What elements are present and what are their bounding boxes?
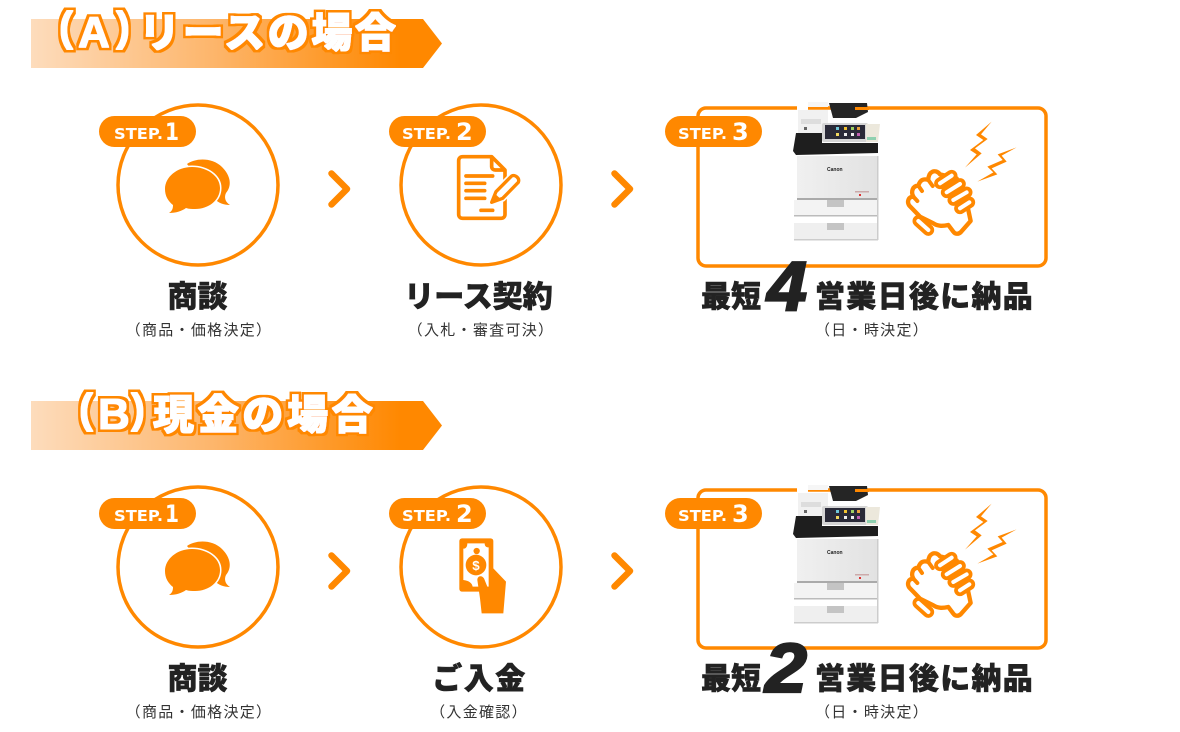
section B: cash flow: [31, 381, 1046, 722]
caption: 商品・価格決定: （商品・価格決定）: [126, 319, 272, 340]
badge: STEP.3: STEP.: [678, 507, 727, 525]
caption: 日・時決定: （日・時決定）: [815, 701, 929, 722]
step 1 circle: negotiation: [99, 105, 278, 265]
badge: STEP.2: 2: [456, 500, 473, 528]
badge: STEP.2: 2: [456, 118, 473, 146]
photo: multifunction printer: Canon: [827, 550, 843, 556]
step 2 circle: payment: [389, 487, 561, 647]
icon: speech bubbles: [165, 159, 230, 213]
badge: STEP.2: [389, 498, 486, 529]
photo: multifunction printer: [793, 102, 880, 240]
photo: multifunction printer: [793, 485, 880, 624]
banner: (B) cash: [31, 381, 442, 450]
caption: 入金確認: （入金確認）: [430, 701, 528, 722]
banner: (A) lease: A: [78, 8, 110, 57]
photo: multifunction printer: Canon: [827, 167, 843, 173]
heading: 最短2営業日後に納品: [701, 629, 1034, 707]
icon: clasped hands with lightning: [908, 122, 1017, 234]
caption: 日・時決定: （日・時決定）: [815, 319, 929, 340]
banner: (A) lease: (: [59, 3, 73, 50]
step 2 circle: contract: [389, 105, 561, 265]
arrow: [614, 556, 630, 586]
banner: (A) lease: [31, 0, 442, 68]
heading: 最短2営業日後に納品: 最短: [701, 654, 761, 698]
section A: lease flow: [31, 0, 1046, 340]
badge: STEP.2: [389, 116, 486, 147]
badge: STEP.1: [99, 498, 196, 529]
icon: document and pen: [459, 157, 519, 218]
badge: STEP.2: STEP.: [402, 507, 451, 525]
badge: STEP.1: STEP.: [114, 125, 163, 143]
arrow: [332, 174, 347, 204]
heading: 最短4営業日後に納品: 4: [765, 247, 807, 325]
banner: (B) cash: 現金の場合: [153, 381, 376, 441]
banner: (B) cash: B: [98, 390, 130, 439]
icon: hand with banknote: [459, 538, 506, 613]
heading: 商談: 商談: [168, 272, 228, 316]
heading: 最短4営業日後に納品: 最短: [701, 272, 761, 316]
heading: 商談: 商談: [168, 654, 228, 698]
step 3 box: delivery: [665, 102, 1046, 266]
badge: STEP.2: STEP.: [402, 125, 451, 143]
banner: (A) lease: ): [116, 3, 130, 50]
heading: 最短4営業日後に納品: 営業日後に納品: [815, 272, 1034, 316]
badge: STEP.1: 1: [165, 118, 179, 146]
badge: STEP.1: [99, 116, 196, 147]
badge: STEP.3: 3: [732, 500, 749, 528]
banner: (A) lease: リースの場合: [139, 0, 399, 59]
arrow: [332, 556, 347, 586]
banner: (B) cash: ): [131, 385, 145, 432]
caption: 商品・価格決定: （商品・価格決定）: [126, 701, 272, 722]
heading: リース契約: リース契約: [404, 272, 553, 316]
icon: clasped hands with lightning: [908, 504, 1017, 616]
icon: speech bubbles: [165, 541, 230, 595]
badge: STEP.1: STEP.: [114, 507, 163, 525]
icon: hand with banknote: $: [472, 558, 480, 573]
heading: 最短2営業日後に納品: 2: [763, 629, 807, 707]
arrow: [614, 174, 630, 204]
badge: STEP.1: 1: [165, 500, 179, 528]
badge: STEP.3: STEP.: [678, 125, 727, 143]
step 1 circle: negotiation: [99, 487, 278, 647]
heading: 最短4営業日後に納品: [701, 247, 1034, 325]
caption: 入札・審査可決: （入札・審査可決）: [408, 319, 554, 340]
badge: STEP.3: [665, 116, 762, 147]
badge: STEP.3: [665, 498, 762, 529]
heading: ご入金: ご入金: [432, 654, 527, 698]
badge: STEP.3: 3: [732, 118, 749, 146]
heading: 最短2営業日後に納品: 営業日後に納品: [815, 654, 1034, 698]
step 3 box: delivery: [665, 485, 1046, 648]
banner: (B) cash: (: [79, 385, 93, 432]
